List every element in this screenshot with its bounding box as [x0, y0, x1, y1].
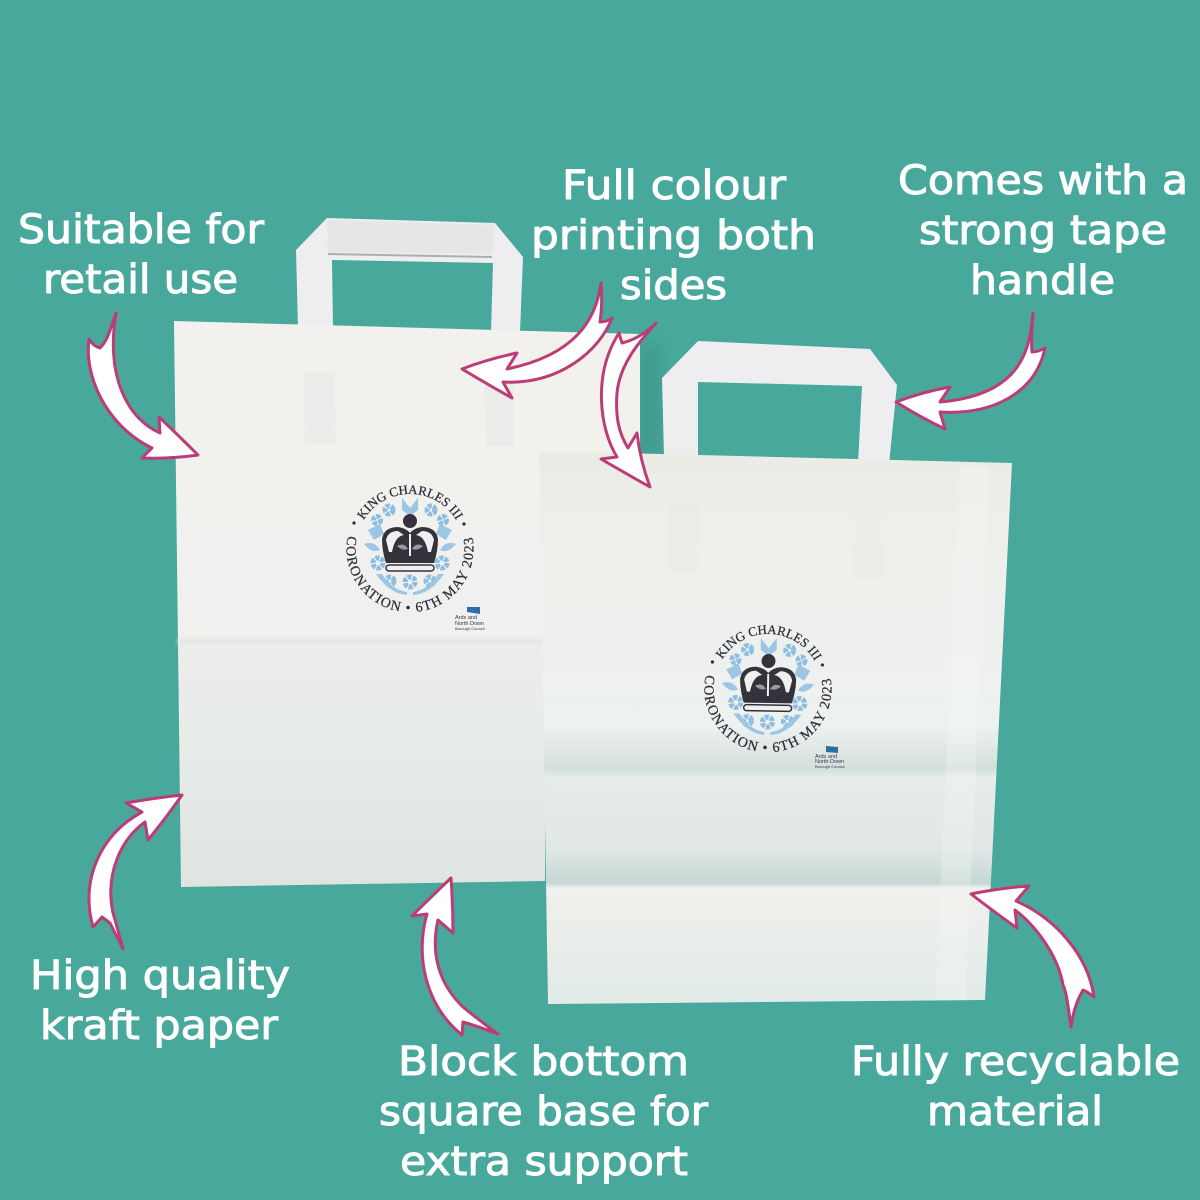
arrow: recyclable: [971, 886, 1094, 1027]
arrow: retail use: [88, 313, 198, 458]
emblem: right bag: [704, 625, 832, 752]
label: fully recyclable material: Fully recyclable: [851, 1039, 1180, 1085]
label: suitable for retail use: [18, 207, 265, 303]
label: block bottom square base: Block bottom: [398, 1039, 689, 1085]
council logo: right bag: [815, 746, 845, 769]
label: full colour printing both sides: Full colour: [562, 163, 787, 209]
right bag handle: [662, 341, 897, 464]
council logo: right bag: Ards and: [815, 754, 837, 760]
label: comes with a strong tape handle: handle: [970, 258, 1115, 304]
floral wreath: [721, 637, 815, 736]
floral wreath: [364, 498, 456, 595]
council logo: left bag: Borough Council: [455, 626, 485, 631]
crown: [740, 654, 797, 711]
emblem text: CORONATION • 6TH MAY 2023: [346, 536, 474, 612]
right bag: [539, 341, 1012, 1004]
label: comes with a strong tape handle: Comes with a: [898, 158, 1188, 204]
left bag shadow: [640, 345, 660, 455]
council logo: left bag: Ards and: [455, 615, 477, 621]
label: high quality kraft paper: High quality: [30, 953, 290, 999]
arrow: kraft paper: [89, 795, 182, 949]
arrow: tape handle: [896, 313, 1045, 429]
label: comes with a strong tape handle: [898, 158, 1188, 304]
council logo: left bag: North Down: [455, 621, 484, 627]
label: fully recyclable material: [851, 1039, 1180, 1135]
arrow: printing front: [462, 283, 612, 398]
emblem text: [346, 485, 474, 612]
label: fully recyclable material: material: [927, 1089, 1103, 1135]
emblem text: KING CHARLES III: [356, 485, 464, 520]
left bag: [174, 218, 660, 887]
label: block bottom square base: square base for: [379, 1089, 709, 1135]
council logo: left bag: [455, 607, 485, 631]
emblem text: [704, 625, 832, 752]
label: suitable for retail use: retail use: [43, 257, 238, 303]
label: block bottom square base: extra support: [400, 1139, 688, 1185]
left bag body: [174, 321, 640, 887]
label: high quality kraft paper: [30, 953, 290, 1049]
arrow: block bottom: [412, 878, 498, 1035]
arrow: printing back: [601, 323, 656, 487]
label: block bottom square base: [379, 1039, 709, 1185]
right bag body: [539, 451, 1012, 1004]
emblem text: KING CHARLES III: [715, 625, 822, 661]
council logo: right bag: North Down: [815, 759, 844, 765]
emblem: left bag: [346, 485, 474, 612]
label: high quality kraft paper: kraft paper: [40, 1003, 279, 1049]
label: full colour printing both sides: [531, 163, 816, 309]
label: full colour printing both sides: sides: [620, 263, 727, 309]
label: comes with a strong tape handle: strong tape: [919, 208, 1167, 254]
emblem text: CORONATION • 6TH MAY 2023: [704, 676, 832, 752]
label: full colour printing both sides: printing both: [531, 213, 816, 259]
council logo: right bag: Borough Council: [815, 764, 845, 769]
crown: [382, 514, 438, 571]
label: suitable for retail use: Suitable for: [18, 207, 265, 253]
left bag handle: [296, 218, 523, 332]
